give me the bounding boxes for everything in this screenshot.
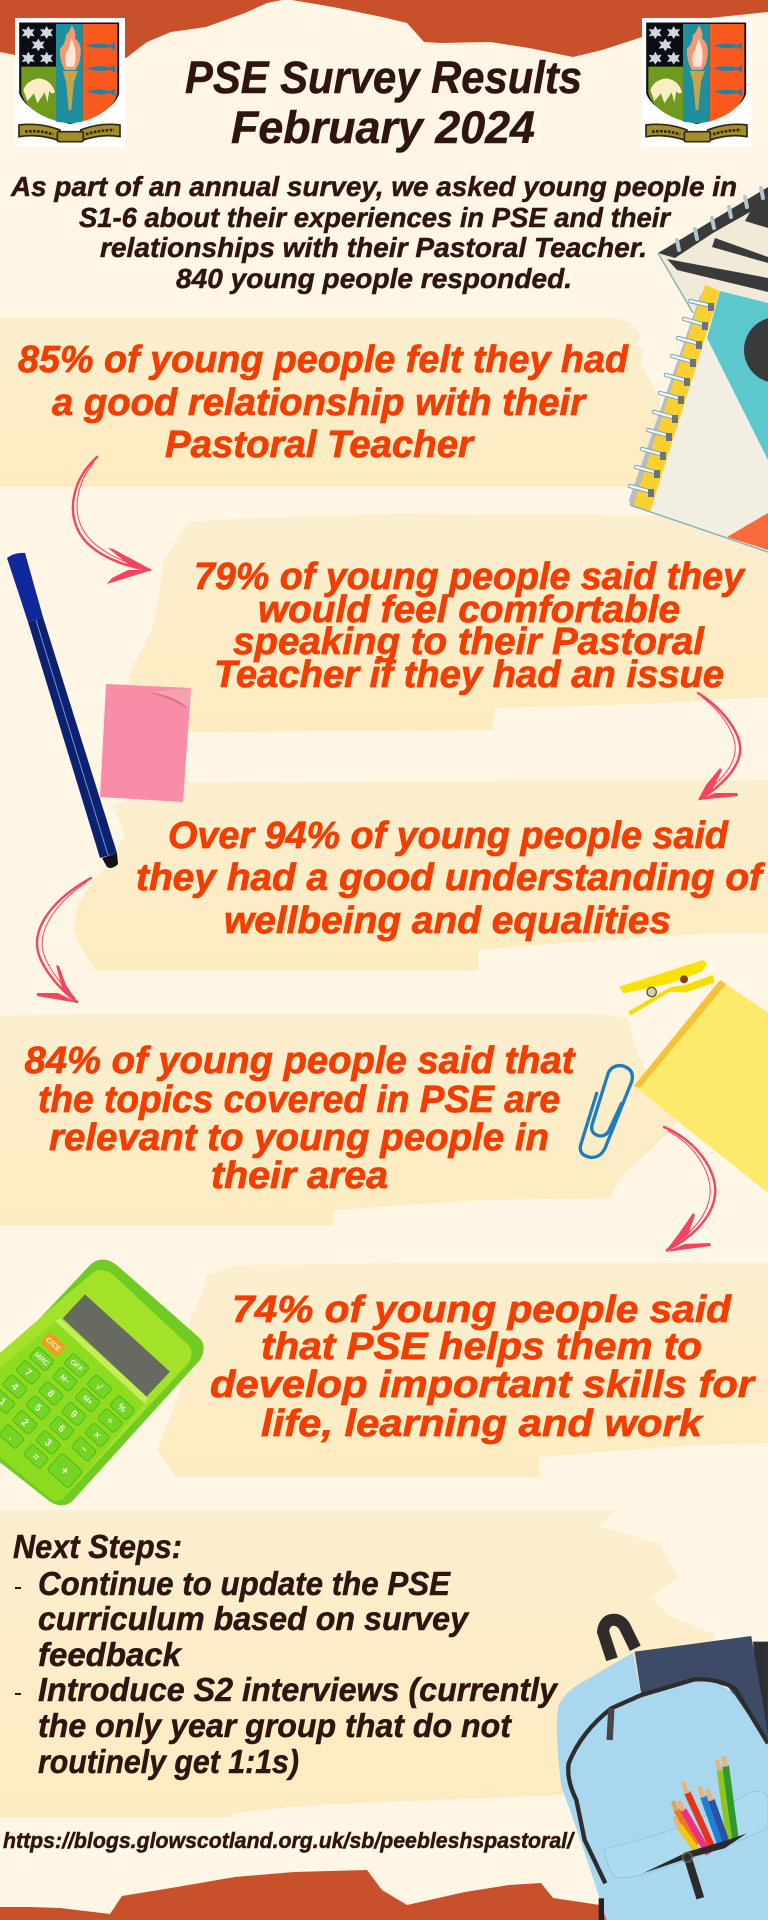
intro text: S1-6 about their experiences in PSE and their: [79, 202, 672, 233]
icon: green calculator: 2: [19, 1417, 31, 1429]
title: PSE Survey Results: [185, 52, 582, 103]
icon: paperclip: [580, 1066, 632, 1157]
stat: 79% comfortable speaking: 79% of young people said they: [194, 556, 746, 598]
icon: blue pen: [7, 553, 118, 868]
torn band: bottom: [0, 1870, 640, 1920]
icon: green calculator: %: [116, 1401, 129, 1415]
icon: green calculator: 3: [42, 1437, 54, 1450]
icon: green calculator: 7: [22, 1367, 34, 1379]
icon: green calculator: OFF: [68, 1357, 86, 1374]
icon: clothes peg: [619, 960, 715, 1016]
icon: green calculator: 9: [68, 1409, 80, 1421]
icon: green calculator: =: [30, 1451, 41, 1463]
stat: 84% relevant topics: [24, 1040, 576, 1197]
back notebook: [753, 1642, 768, 1740]
stat: 85% good relationship: [18, 339, 629, 466]
stat: over 94% wellbeing: they had a good understanding of: [136, 857, 765, 899]
icon: green calculator: √: [94, 1381, 105, 1393]
next steps list: curriculum based on survey: [38, 1600, 470, 1637]
icon: green calculator: −: [78, 1444, 89, 1456]
crest: left: [15, 18, 125, 147]
intro text: relationships with their Pastoral Teacher.: [100, 232, 647, 263]
stat: 74% skills: 74% of young people said: [232, 1289, 732, 1331]
panel: stat 79% background: [127, 514, 768, 732]
stat: over 94% wellbeing: Over 94% of young people said: [168, 815, 729, 857]
bag body: [557, 1653, 768, 1920]
stat: 74% skills: develop important skills for: [210, 1364, 756, 1406]
zip pull: [610, 1708, 611, 1740]
intro text: As part of an annual survey, we asked young people in: [10, 171, 737, 202]
stat: 84% relevant topics: the topics covered in PSE are: [38, 1079, 560, 1121]
stat: 79% comfortable speaking: would feel comfortable: [258, 589, 680, 631]
stat: 85% good relationship: 85% of young people felt they had: [18, 339, 629, 381]
front pocket: [605, 1791, 768, 1878]
pencils: [673, 1756, 735, 1855]
icon: green calculator: 8: [45, 1388, 57, 1400]
stat: 85% good relationship: Pastoral Teacher: [165, 424, 475, 466]
zip outline: [568, 1679, 768, 1883]
navy notebook: [635, 1636, 768, 1747]
stat: 74% skills: life, learning and work: [261, 1403, 704, 1445]
next steps list: feedback: [38, 1636, 183, 1673]
panel: stat 74% background: [157, 1263, 768, 1477]
crest: right: [642, 18, 752, 147]
next steps list: Continue to update the PSE: [38, 1565, 451, 1602]
side strap: [593, 1898, 609, 1920]
panel: stat 85% background: [0, 317, 660, 487]
intro text: 840 young people responded.: [176, 263, 572, 294]
arrow: 94% to 84%: [37, 878, 91, 1003]
icon: green calculator: MRC: [33, 1350, 52, 1368]
icon: green calculator: M+: [81, 1393, 95, 1407]
icon: green calculator: 5: [32, 1402, 44, 1415]
url: https://blogs.glowscotland.org.uk/sb/peebleshspastoral/: [3, 1828, 576, 1853]
handle: [603, 1620, 635, 1659]
icon: green calculator: 4: [9, 1381, 21, 1394]
stat: 74% skills: that PSE helps them to: [261, 1326, 702, 1368]
panel: stat 94% background: [73, 780, 768, 970]
arrow: 84% to 74%: [664, 1127, 715, 1252]
icon: green calculator: +: [58, 1463, 72, 1478]
next steps list: the only year group that do not: [38, 1707, 513, 1744]
icon: green calculator: ÷: [104, 1415, 116, 1428]
teal and yellow spiral notebook: [629, 285, 768, 552]
next steps list: Introduce S2 interviews (currently: [38, 1671, 559, 1708]
stat: over 94% wellbeing: wellbeing and equalities: [224, 900, 671, 942]
stat: 84% relevant topics: relevant to young people in: [49, 1117, 549, 1159]
stat: 79% comfortable speaking: speaking to their Pastoral: [233, 621, 705, 663]
next steps list: routinely get 1:1s): [38, 1743, 299, 1780]
pocket zip and strap: [643, 1833, 747, 1873]
intro text: [10, 171, 737, 294]
stat: 85% good relationship: a good relationship with their: [52, 382, 587, 424]
stat: 79% comfortable speaking: [194, 556, 746, 696]
icon: pink sticky note: [100, 684, 191, 802]
arrow: 79% to 94%: [698, 693, 740, 800]
stat: 79% comfortable speaking: Teacher if they had an issue: [214, 654, 724, 696]
next steps list: [13, 1528, 559, 1780]
arrow: 85% to 79%: [73, 457, 152, 584]
next steps list: Next Steps:: [13, 1528, 182, 1565]
icon: green calculator: [0, 1260, 204, 1505]
icon: blue backpack with pencils: [557, 1620, 768, 1920]
icon: green calculator: ×: [91, 1430, 103, 1442]
title: February 2024: [231, 102, 535, 153]
title: [185, 52, 582, 153]
stat: 84% relevant topics: 84% of young people said that: [24, 1040, 576, 1082]
black striped notebook: [658, 187, 768, 340]
stat: 84% relevant topics: their area: [211, 1155, 388, 1197]
icon: green calculator: 6: [55, 1423, 67, 1435]
stat: over 94% wellbeing: [136, 815, 765, 942]
icon: green calculator: .: [6, 1432, 16, 1442]
icon: green calculator: C/CE: [44, 1335, 63, 1353]
panel: next steps background: [0, 1510, 715, 1817]
panel: stat 84% background: [0, 1013, 677, 1225]
torn band: top: [0, 0, 768, 62]
icon: yellow sticky note: [634, 980, 768, 1193]
stat: 74% skills: [210, 1289, 756, 1445]
icon: notebooks: [629, 187, 768, 552]
icon: green calculator: M−: [58, 1372, 72, 1386]
